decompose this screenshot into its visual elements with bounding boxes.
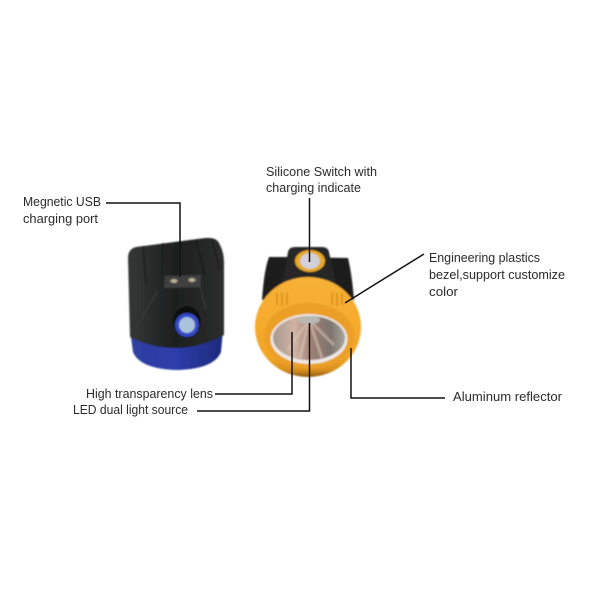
label: magnetic USB charging port: charging port <box>23 212 99 226</box>
left lamp (rear view) <box>128 238 224 370</box>
label: magnetic USB charging port <box>23 195 101 226</box>
label: engineering plastics bezel: Engineering plastics <box>429 251 540 265</box>
label: silicone switch: Silicone Switch with <box>266 165 377 179</box>
switch <box>295 250 325 272</box>
blue base <box>130 330 223 370</box>
orange bezel <box>255 277 361 377</box>
label: magnetic USB charging port: Megnetic USB <box>23 195 101 209</box>
label: engineering plastics bezel: color <box>429 285 458 299</box>
reflector lens <box>270 314 348 364</box>
label: engineering plastics bezel <box>429 251 565 299</box>
black housing <box>128 238 224 348</box>
black top tab <box>282 247 336 285</box>
label: silicone switch <box>266 165 377 195</box>
blue button <box>173 306 201 338</box>
label: LED dual light source: LED dual light source <box>73 403 188 417</box>
USB charging port <box>164 275 201 288</box>
label: high transparency lens: High transparency lens <box>86 387 213 401</box>
label: aluminum reflector: Aluminum reflector <box>453 390 562 404</box>
label: engineering plastics bezel: bezel,support customize <box>429 268 565 282</box>
right lamp (front view) <box>255 247 361 377</box>
LED <box>298 316 320 324</box>
black wings <box>262 257 354 300</box>
callout lines <box>106 198 445 411</box>
label: silicone switch: charging indicate <box>266 181 361 195</box>
